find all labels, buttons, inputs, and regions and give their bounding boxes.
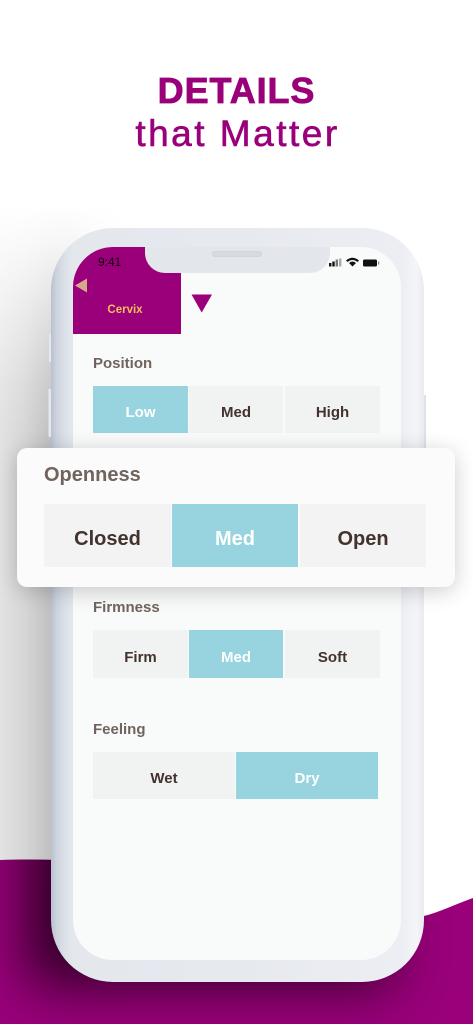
speaker — [212, 251, 262, 257]
left drop shadow on white — [0, 205, 125, 870]
panel: position — [93, 355, 349, 433]
dry: Dry — [294, 770, 320, 787]
firm — [93, 630, 188, 678]
header tab — [73, 247, 181, 334]
soft — [285, 630, 380, 678]
med — [172, 504, 298, 567]
screen — [73, 247, 401, 960]
callout card: openness — [17, 448, 455, 587]
low — [93, 386, 188, 433]
position label: Position — [93, 355, 152, 372]
panel: feeling — [93, 721, 378, 799]
dropdown arrow icon — [192, 294, 212, 312]
firm: Firm — [124, 648, 157, 666]
med: Med — [221, 648, 251, 666]
med: Med — [221, 404, 251, 421]
feeling label: Feeling — [93, 721, 146, 738]
wet — [93, 752, 235, 799]
back arrow icon — [75, 278, 87, 292]
closed — [44, 504, 171, 567]
title: DETAILS — [158, 70, 315, 111]
high — [285, 386, 380, 433]
low: Low — [126, 404, 156, 421]
high: High — [316, 404, 349, 421]
panel: firmness — [93, 599, 347, 678]
soft: Soft — [318, 648, 347, 666]
med — [189, 386, 283, 433]
firmness label: Firmness — [93, 599, 160, 616]
phone — [51, 228, 424, 982]
wet: Wet — [150, 770, 178, 787]
open: Open — [337, 528, 389, 550]
status icons — [329, 258, 380, 266]
open — [300, 504, 426, 567]
purple wave — [0, 860, 473, 1024]
dry — [236, 752, 378, 799]
status time: 9:41 — [98, 255, 121, 269]
med: Med — [215, 528, 255, 550]
title — [135, 70, 340, 154]
title: that Matter — [135, 113, 340, 154]
closed: Closed — [74, 528, 141, 550]
notch — [145, 247, 330, 273]
tab label: Cervix: Cervix — [107, 304, 143, 316]
openness label: Openness — [44, 464, 141, 486]
med — [189, 630, 283, 678]
